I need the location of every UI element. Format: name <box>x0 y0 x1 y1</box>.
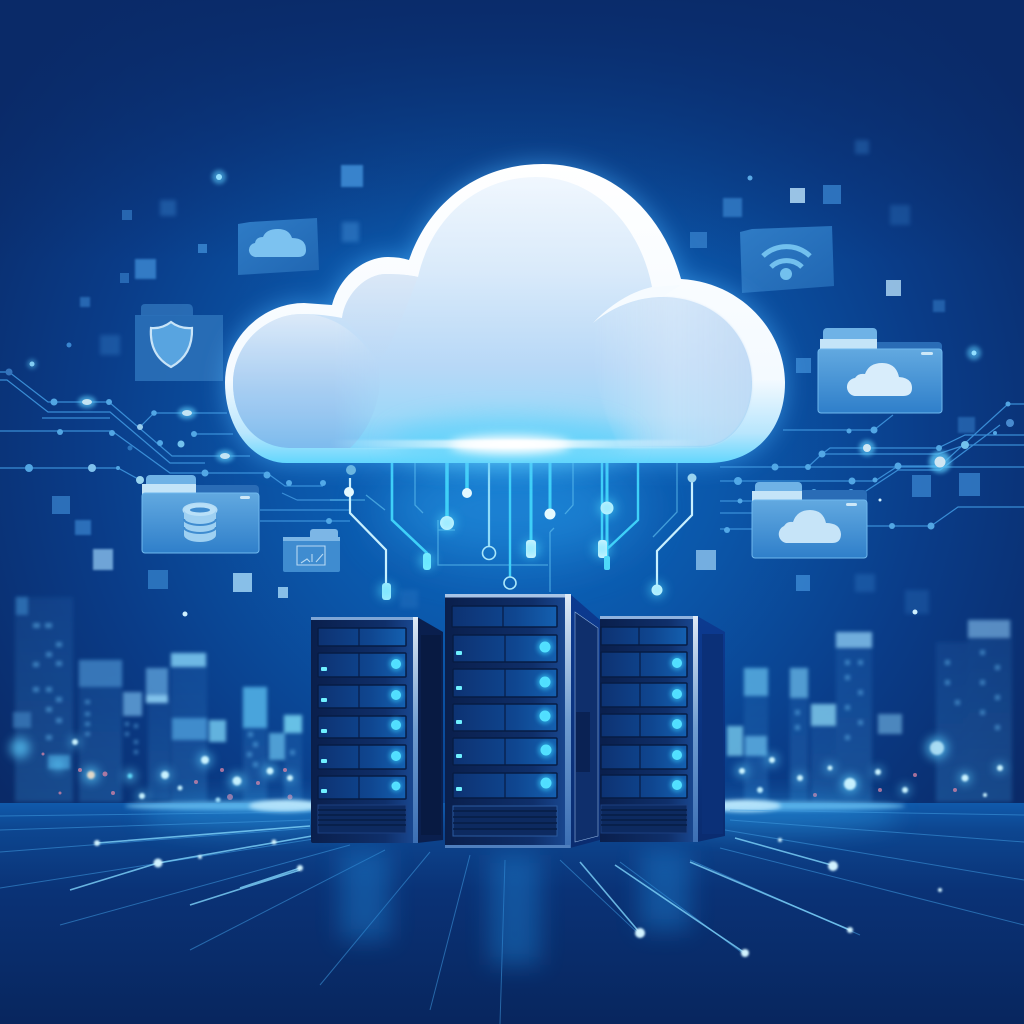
floor <box>0 797 1024 1024</box>
icon: cloud <box>249 229 306 257</box>
floor light streaks <box>70 826 850 953</box>
drive bays <box>601 627 687 798</box>
floor light dots <box>94 838 942 957</box>
drive bays <box>318 628 406 799</box>
icon: image <box>297 546 325 565</box>
server rack: right <box>600 616 725 842</box>
icon: wifi <box>763 247 810 280</box>
blurred city skyline: left <box>13 597 302 803</box>
cloud small lobe <box>342 274 418 363</box>
card: cloud icon <box>238 218 319 275</box>
icon: cloud <box>779 510 841 543</box>
status lights <box>321 659 401 793</box>
cloud <box>225 164 785 468</box>
cloud body <box>233 177 752 448</box>
left side circuit traces <box>0 362 350 524</box>
vent <box>318 805 406 833</box>
status lights <box>456 642 552 791</box>
folder: database <box>142 475 259 553</box>
left circuit nodes <box>6 362 332 524</box>
floor reflections <box>340 850 690 965</box>
city lights <box>10 737 1005 802</box>
glow under cloud <box>380 460 640 560</box>
connector end rings <box>482 546 516 589</box>
server light glows <box>389 639 684 792</box>
floating squares and particles <box>27 140 981 616</box>
folder: image small <box>283 529 340 572</box>
folder: cloud, lower right <box>752 482 867 558</box>
connector end nodes <box>344 465 696 600</box>
horizon glow <box>125 797 905 833</box>
folder: cloud, upper right <box>818 328 942 413</box>
city windows <box>33 623 295 767</box>
vent <box>453 806 557 836</box>
card: wifi icon <box>740 226 834 293</box>
cloud rim <box>225 164 785 463</box>
status lights <box>672 658 682 790</box>
left glowing nodes <box>78 396 234 462</box>
connector glows <box>378 499 665 599</box>
floor perspective lines <box>0 810 1024 1024</box>
right side circuit traces <box>720 402 1024 533</box>
connector lines from cloud to servers <box>344 463 696 600</box>
faint circuit traces under cloud <box>330 463 677 592</box>
icon: database <box>184 504 216 542</box>
cloud right lobe <box>592 297 752 447</box>
vent <box>601 805 687 833</box>
cloud left lobe <box>233 314 380 448</box>
blurred city skyline: right <box>727 620 1012 802</box>
cloud right lobe highlight <box>593 285 681 323</box>
light halos <box>10 737 1005 801</box>
right glowing nodes <box>859 440 951 473</box>
cloud bright lower glow <box>390 416 630 468</box>
icon: cloud <box>847 363 912 396</box>
server rack: left <box>311 617 443 843</box>
card: shield icon <box>135 304 223 381</box>
cloud light flare <box>330 436 700 454</box>
cloud halo <box>225 164 785 463</box>
drive bays <box>452 606 557 798</box>
icon: shield <box>151 322 192 367</box>
city windows <box>795 650 1000 740</box>
right circuit nodes <box>724 402 1014 533</box>
pink sparks <box>42 752 957 800</box>
server rack: center <box>445 594 600 848</box>
